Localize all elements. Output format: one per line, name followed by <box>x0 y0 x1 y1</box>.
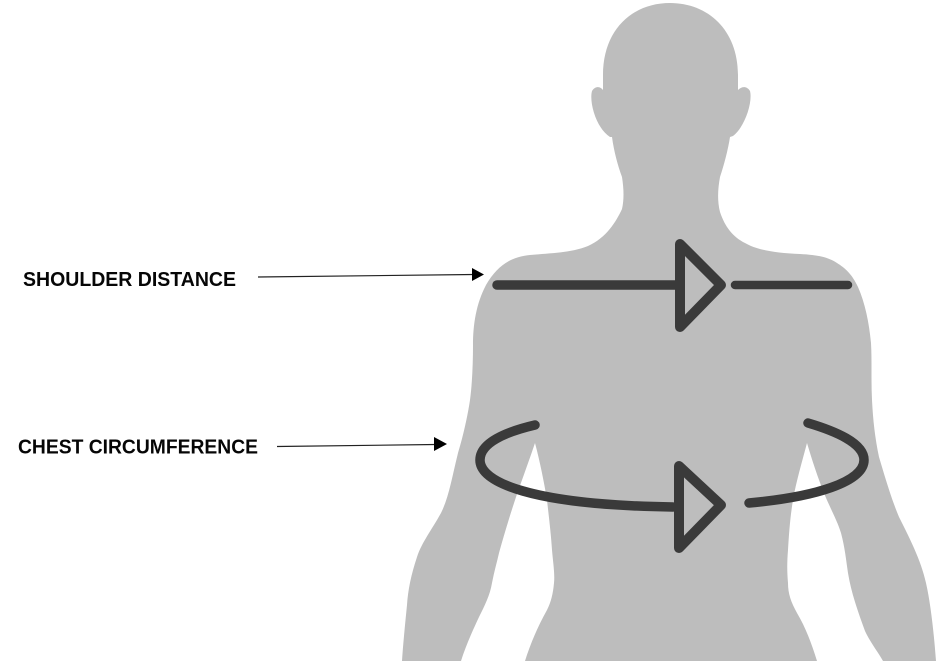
label: shoulder distance: SHOULDER DISTANCE <box>23 268 236 291</box>
shoulder measurement line with arrow <box>497 244 848 327</box>
label: chest circumference: CHEST CIRCUMFERENCE <box>18 436 258 458</box>
chest measurement loop with arrow <box>480 423 864 548</box>
body silhouette <box>402 3 936 661</box>
pointer arrow: shoulder distance <box>258 268 484 281</box>
pointer arrow: chest circumference <box>277 437 447 451</box>
